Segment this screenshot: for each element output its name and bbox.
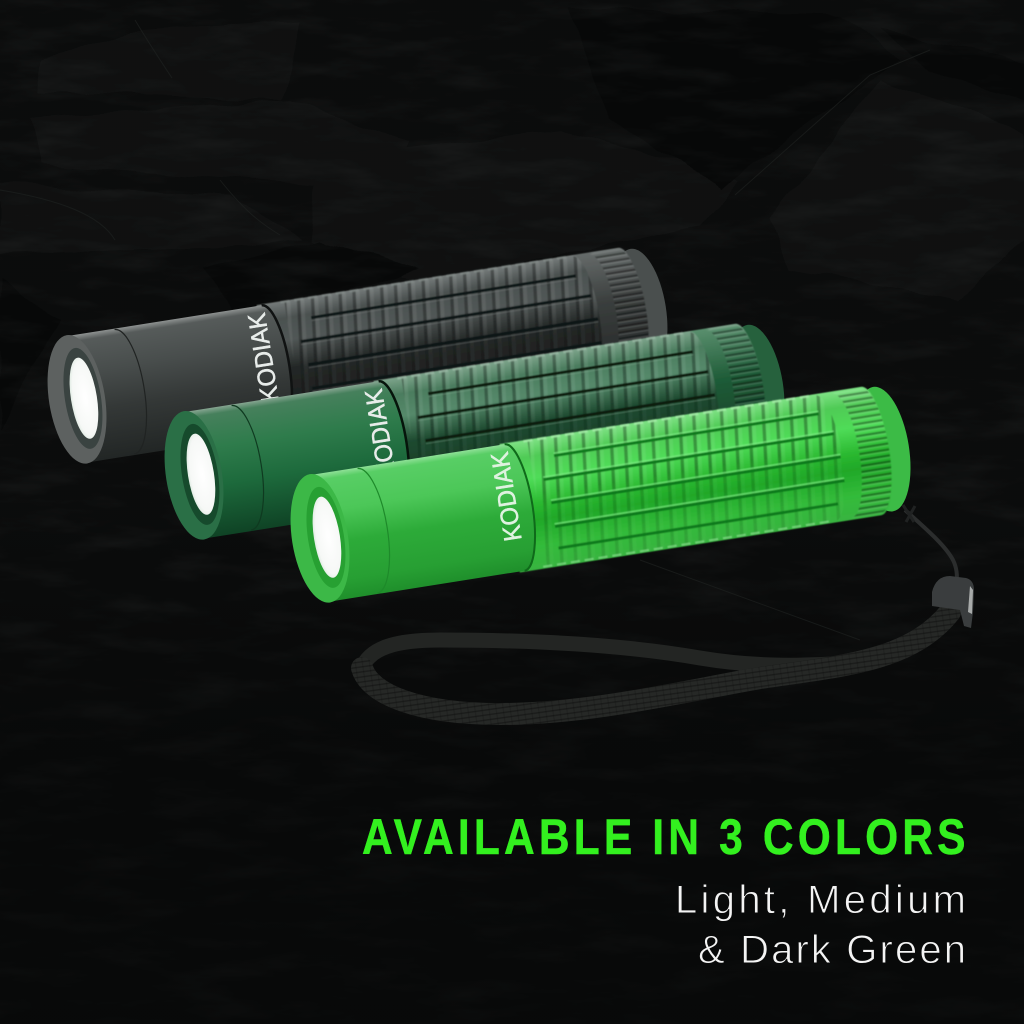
wrist strap (362, 612, 950, 714)
head barrel: medium green (186, 378, 416, 538)
brand label: KODIAK: KODIAK (360, 387, 402, 480)
barrel grip: medium green (373, 323, 766, 460)
brand label: KODIAK: KODIAK (243, 311, 285, 404)
head barrel: dark (69, 302, 299, 462)
strap: lower thick cord (362, 612, 950, 714)
subtitle line 1: Light, Medium (675, 878, 966, 922)
front bezel and lens (39, 331, 115, 468)
flashlight: light green (282, 381, 919, 607)
barrel grip: light green (499, 384, 899, 572)
front bezel and lens (156, 407, 232, 544)
strap slider and thin cord (903, 505, 974, 628)
heading: available in 3 colors: AVAILABLE IN 3 COLORS (362, 809, 966, 865)
flashlight: medium green (156, 318, 793, 544)
head barrel: light green (312, 441, 542, 601)
strap: upper cord (362, 640, 860, 668)
front bezel and lens (282, 470, 358, 607)
flashlight: dark grey (39, 242, 676, 468)
brand label: KODIAK: KODIAK (486, 450, 528, 543)
subtitle: color names (675, 878, 966, 972)
barrel grip: dark (256, 247, 650, 395)
subtitle line 2: & Dark Green (698, 928, 966, 972)
